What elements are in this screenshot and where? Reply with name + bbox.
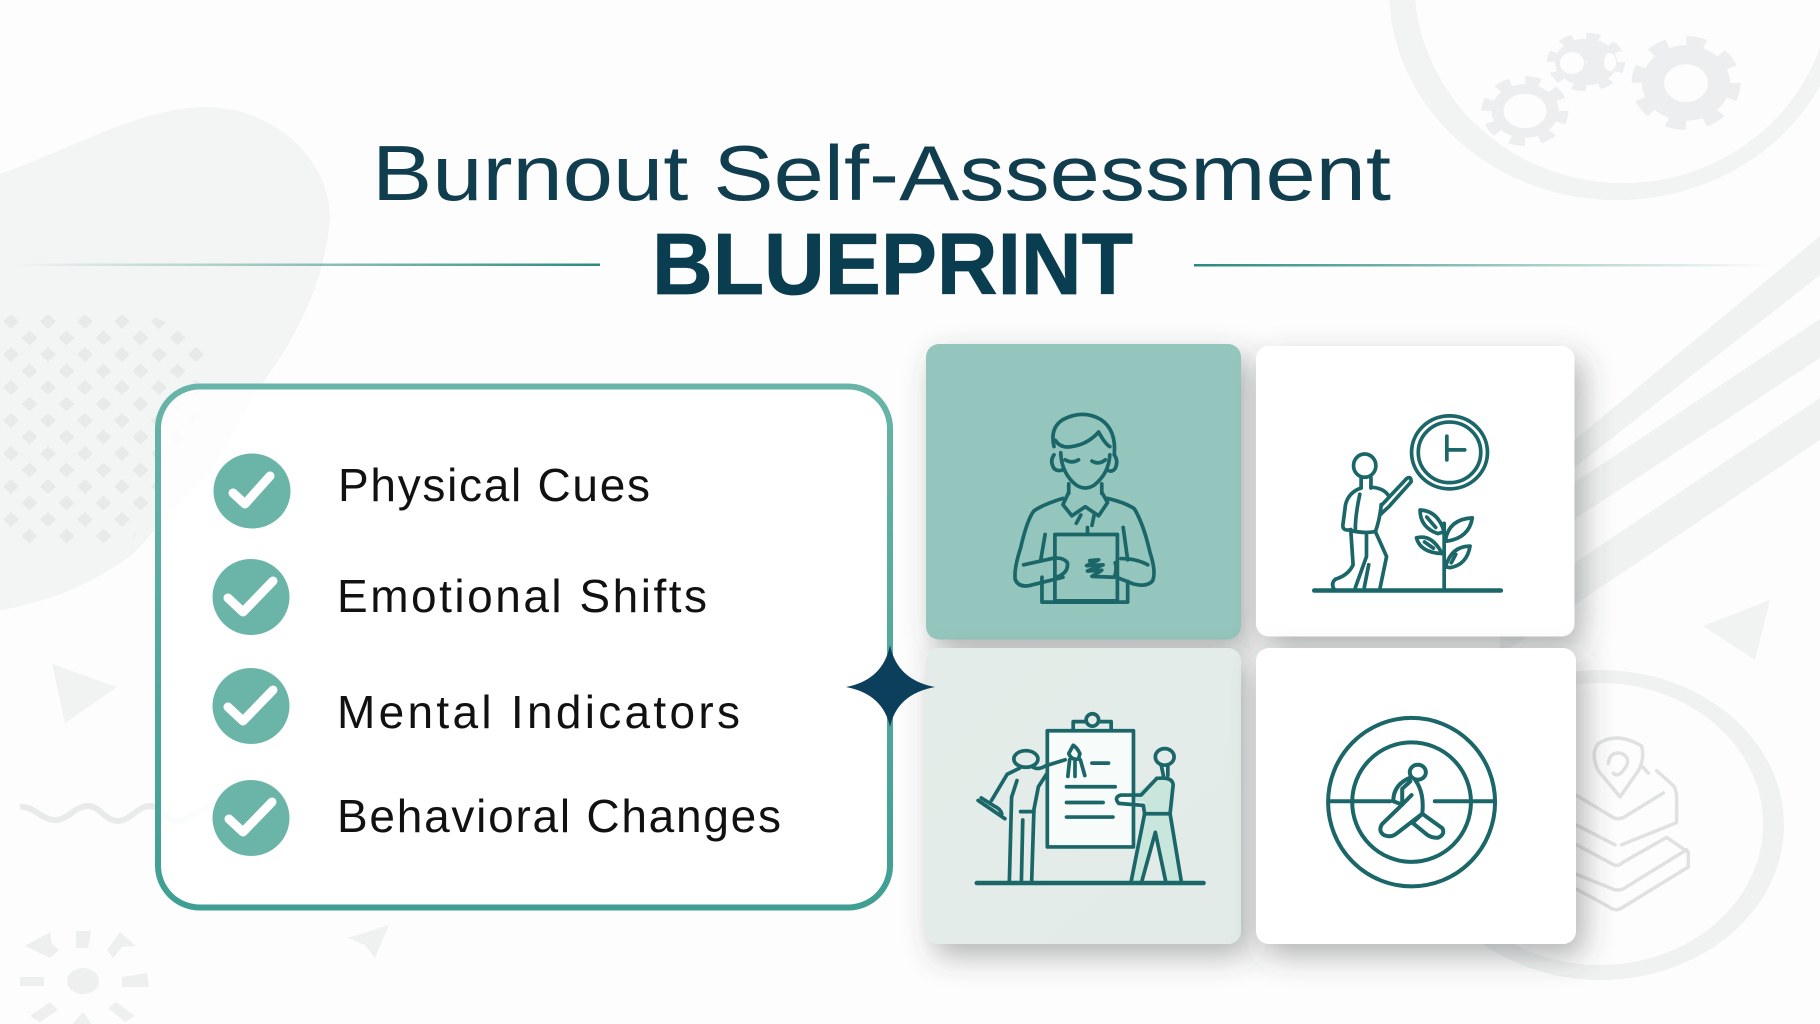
decorative stripes	[1500, 236, 1820, 655]
decorative stack icon	[1577, 738, 1688, 910]
item: Behavioral Changes	[212, 780, 781, 856]
item: Mental Indicators	[212, 668, 740, 744]
divider lines	[10, 264, 1770, 266]
decorative ring: bottom right	[1417, 670, 1784, 980]
decorative dot grid	[0, 310, 210, 550]
panel frame	[158, 386, 890, 908]
card: person with clipboard	[926, 344, 1241, 640]
icon: figure inside concentric circles	[1328, 718, 1495, 886]
card: person, clock and plant	[1256, 346, 1574, 636]
item: Emotional Shifts	[212, 559, 707, 635]
icon: person reaching toward clock with plant	[1314, 416, 1501, 591]
decorative triangle: right	[1703, 600, 1770, 660]
item: Behavioral Changes: Behavioral Changes	[337, 790, 781, 842]
decorative blob: left	[0, 107, 330, 610]
card: people with clipboard	[926, 648, 1241, 944]
item: Emotional Shifts: Emotional Shifts	[337, 570, 707, 622]
icon: two people beside clipboard	[977, 714, 1204, 883]
icon: person holding clipboard	[1015, 414, 1154, 602]
heading: BLUEPRINT: BLUEPRINT	[652, 216, 1133, 313]
panel: checklist	[158, 386, 890, 908]
heading: Burnout Self-Assessment: Burnout Self-Assessment	[372, 129, 1391, 217]
decorative wave	[20, 806, 213, 821]
card: circular walking figure	[1256, 648, 1576, 944]
decorative gears	[1487, 36, 1734, 141]
title	[10, 129, 1770, 313]
decorative triangle: left	[52, 664, 117, 723]
decorative gear holes	[1560, 52, 1616, 74]
connector star	[846, 645, 935, 727]
item: Physical Cues: Physical Cues	[338, 459, 650, 511]
decorative ring: top right	[1389, 0, 1820, 200]
decorative sun	[20, 931, 149, 1024]
decorative paper plane	[348, 925, 389, 958]
item: Mental Indicators: Mental Indicators	[337, 686, 740, 738]
item: Physical Cues	[214, 454, 650, 528]
